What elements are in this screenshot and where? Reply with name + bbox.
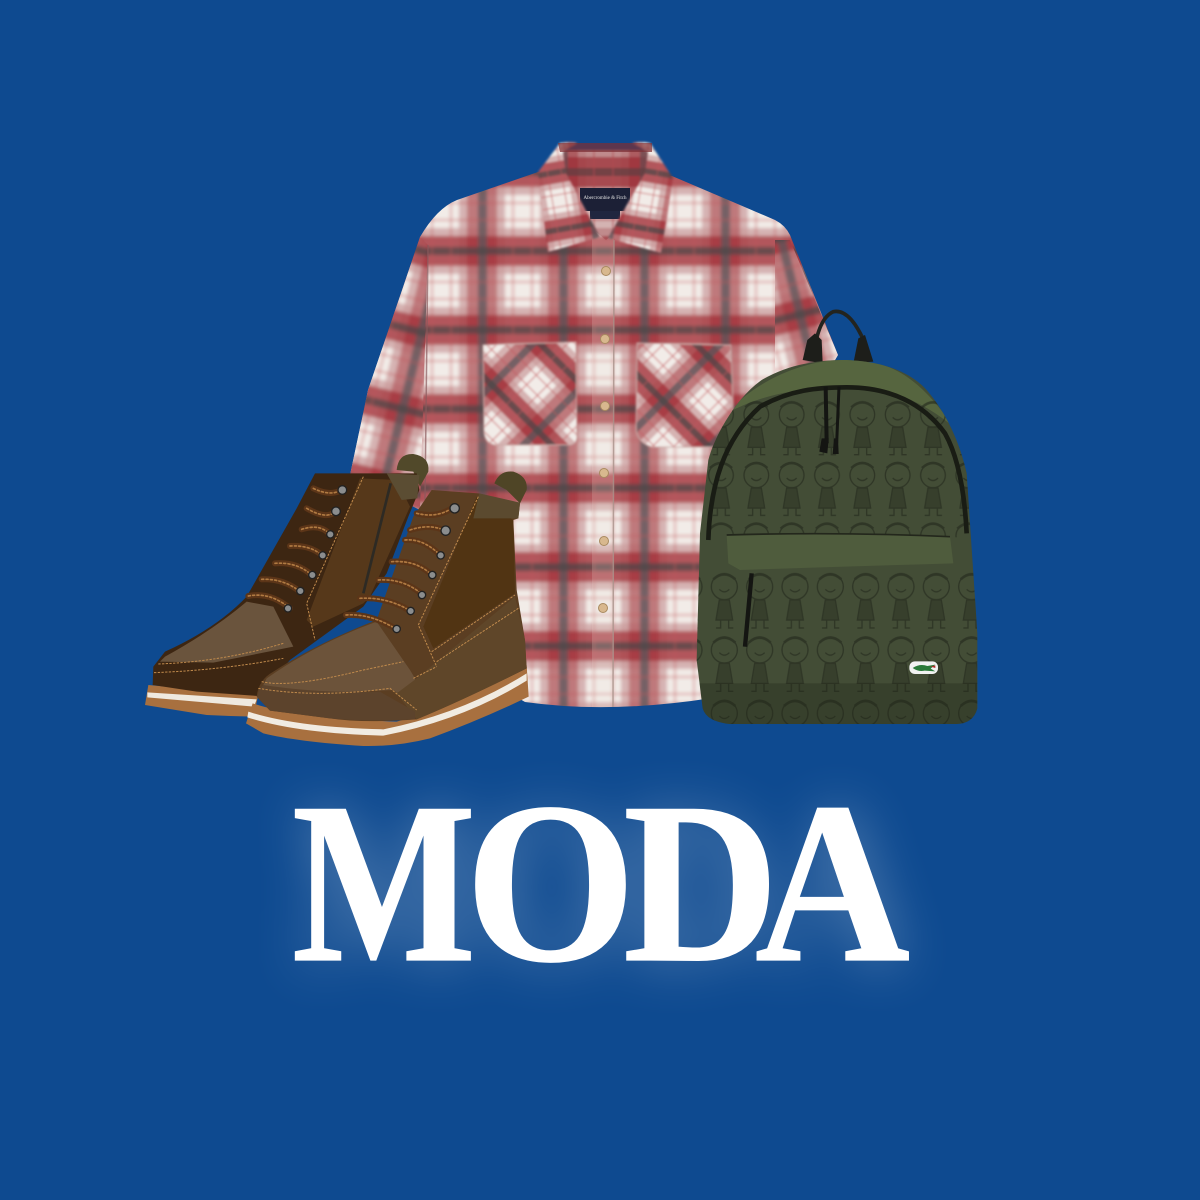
right boot stitching: [258, 497, 518, 710]
backpack print: [690, 387, 990, 727]
right boot vamp: [262, 622, 417, 710]
title: MODA: O: [465, 755, 636, 1010]
backpack top panel: [733, 360, 948, 422]
left boot eyelets: [284, 486, 347, 612]
title: MODA: A: [755, 755, 910, 1010]
right boot upper: [257, 490, 527, 721]
right boot eyelets: [393, 504, 459, 633]
backpack front pocket: [727, 534, 953, 570]
right boot pull tab: [494, 471, 527, 503]
backpack zipper pulls: [745, 387, 839, 647]
shirt right pocket: [636, 343, 734, 447]
title: MODA: D: [623, 755, 779, 1010]
backpack handle: [803, 311, 873, 363]
left boot suede shaft: [307, 478, 410, 627]
right boot sole: [246, 665, 529, 746]
shirt body: [340, 160, 850, 720]
right boot laces: [346, 508, 452, 628]
shirt buttons: [598, 266, 610, 612]
boots pair: [145, 454, 529, 746]
right boot lower quarter: [397, 597, 527, 719]
left boot: [145, 454, 428, 717]
backpack logo patch: [909, 661, 938, 674]
right boot suede shaft: [423, 497, 515, 648]
left boot laces: [248, 488, 342, 608]
shirt collar left: [538, 142, 600, 252]
left boot vamp: [160, 602, 293, 663]
left boot zip: [363, 483, 391, 593]
title glow: MODA: [293, 757, 908, 1012]
right boot: [246, 471, 529, 746]
fashion poster: [145, 140, 978, 986]
shirt collar back: [558, 143, 652, 152]
left boot sole: [145, 685, 258, 717]
shirt left pocket: [483, 342, 577, 445]
shirt neck and label: Abercrombie & Fitch: [583, 196, 627, 201]
left boot upper: [153, 473, 419, 696]
title: MODA: M: [292, 755, 476, 1010]
shirt neck and label: [545, 150, 668, 240]
shirt collar right: [608, 142, 673, 253]
left boot collar: [387, 473, 419, 500]
right boot collar: [473, 493, 520, 518]
left boot stitching: [154, 477, 363, 673]
backpack body: [697, 360, 977, 724]
backpack: green with character print: [690, 311, 990, 727]
left boot pull tab: [397, 454, 428, 487]
shirt: red plaid flannel: [340, 142, 850, 720]
right boot toe: [257, 685, 415, 720]
